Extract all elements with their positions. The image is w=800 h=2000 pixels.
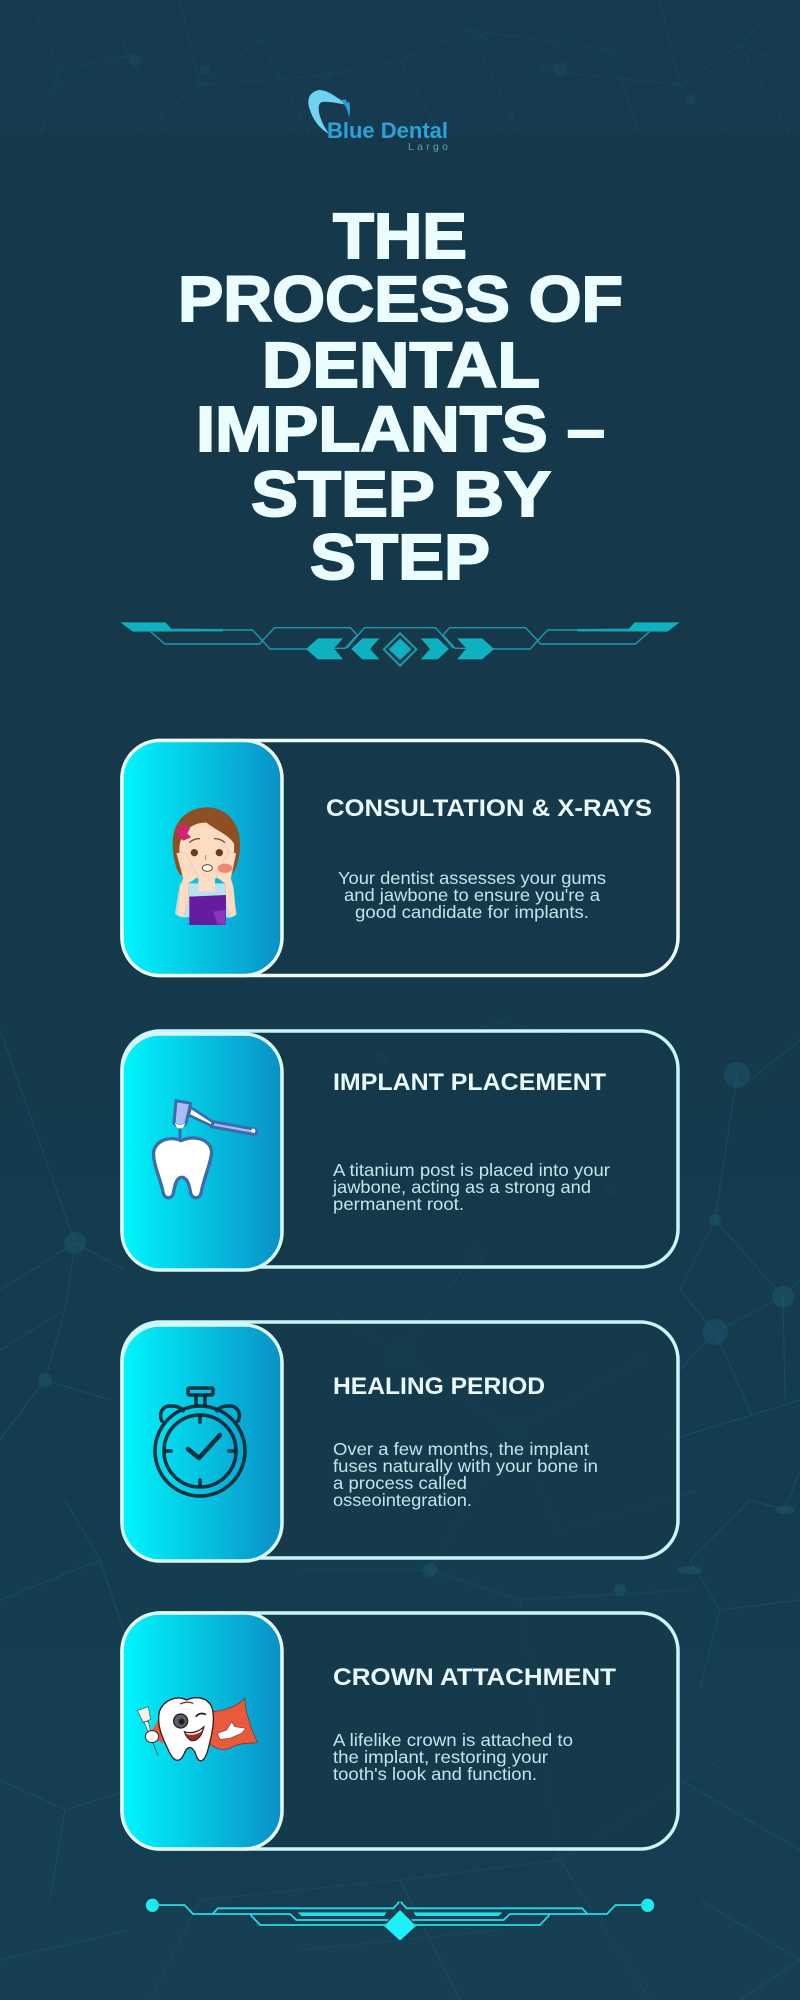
title: THE — [333, 200, 467, 272]
description: permanent root. — [333, 1194, 464, 1214]
gradient icon panel — [122, 1034, 282, 1270]
heading: IMPLANT PLACEMENT — [333, 1069, 606, 1096]
description: A titanium post is placed into your — [333, 1160, 610, 1180]
logo: Blue Dental Largo — [308, 90, 448, 153]
description: and jawbone to ensure you're a — [344, 885, 600, 905]
description: a process called — [333, 1473, 467, 1493]
panel: step 2 implant placement — [122, 1031, 678, 1270]
description — [338, 868, 606, 922]
gradient icon panel — [122, 1325, 282, 1561]
gradient icon panel — [122, 1613, 282, 1849]
icon: logo tooth swoosh — [308, 90, 350, 134]
title: IMPLANTS – — [196, 393, 605, 465]
card outline — [122, 1613, 678, 1849]
description: Over a few months, the implant — [333, 1439, 589, 1459]
card outline — [122, 1031, 678, 1267]
title: STEP BY — [251, 458, 551, 530]
panel: step 4 crown attachment — [122, 1613, 678, 1849]
card outline — [122, 740, 678, 976]
panel: step 1 consultation — [122, 740, 678, 976]
description: A lifelike crown is attached to — [333, 1730, 573, 1750]
background: top network band — [0, 0, 800, 134]
description: fuses naturally with your bone in — [333, 1456, 598, 1476]
divider: bottom circuit ornament — [146, 1899, 654, 1941]
card outline — [122, 1322, 678, 1558]
heading: CONSULTATION & X-RAYS — [326, 795, 652, 822]
description — [333, 1439, 598, 1510]
title: STEP — [310, 521, 490, 593]
description: tooth's look and function. — [333, 1764, 537, 1784]
description: good candidate for implants. — [355, 902, 589, 922]
icon: worried girl with toothache — [173, 807, 240, 925]
background: lower network pattern — [0, 1022, 800, 2000]
description: jawbone, acting as a strong and — [332, 1177, 591, 1197]
title: DENTAL — [262, 329, 540, 401]
icon: dental drill over tooth — [154, 1101, 257, 1198]
description: the implant, restoring your — [333, 1747, 548, 1767]
heading: CROWN ATTACHMENT — [333, 1664, 616, 1691]
description: Your dentist assesses your gums — [338, 868, 606, 888]
description: osseointegration. — [333, 1490, 472, 1510]
logo wordmark: Blue Dental — [327, 118, 448, 143]
title — [178, 200, 623, 593]
panel: step 3 healing period — [122, 1322, 678, 1561]
icon: stopwatch with check — [155, 1388, 245, 1496]
heading: HEALING PERIOD — [333, 1373, 545, 1400]
gradient icon panel — [122, 740, 282, 976]
title: PROCESS OF — [178, 263, 623, 335]
logo sub-text: Largo — [408, 141, 448, 153]
description — [332, 1160, 610, 1214]
description — [333, 1730, 573, 1784]
divider: top ornament — [120, 622, 680, 666]
icon: superhero tooth mascot — [137, 1698, 257, 1761]
